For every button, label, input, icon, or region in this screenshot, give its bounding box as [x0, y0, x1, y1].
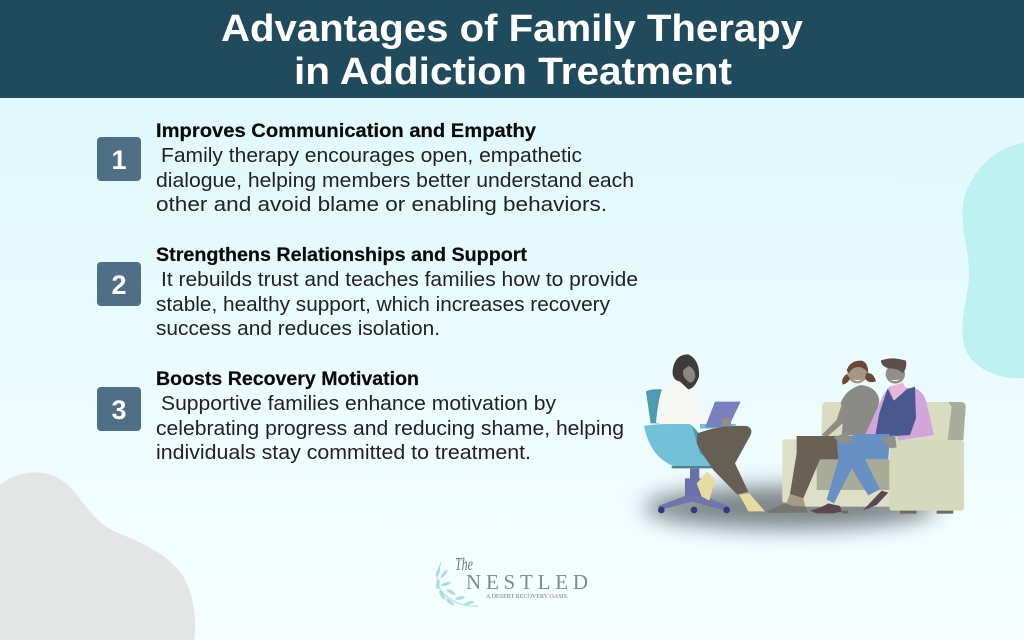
- logo text: The: The: [455, 554, 473, 574]
- item 1 heading: Improves Communication and Empathy: [156, 120, 536, 142]
- chair: [646, 389, 663, 423]
- decorative blob: right teal: [962, 143, 1024, 378]
- item 1: [97, 120, 634, 216]
- item 2 body: [156, 269, 638, 340]
- logo wreath: [435, 563, 478, 606]
- item 3 body: celebrating progress and reducing shame, helping: [156, 418, 624, 440]
- shirt: [656, 383, 715, 424]
- floor shadow: [643, 486, 937, 529]
- item 1 body: Family therapy encourages open, empathetic: [161, 145, 582, 167]
- illustration: therapy session: [643, 354, 966, 529]
- therapist: [644, 354, 765, 513]
- number badge 1: [97, 137, 141, 181]
- clipboard: [705, 402, 741, 427]
- legs: [697, 426, 751, 495]
- item 2: [97, 244, 638, 340]
- item 2 body: stable, healthy support, which increases recovery: [156, 294, 610, 316]
- hair and face: [673, 354, 699, 389]
- item 3 body: individuals stay committed to treatment.: [156, 442, 531, 464]
- sofa: [782, 402, 966, 514]
- logo: The Nestled: [435, 554, 588, 606]
- title banner: in Addiction Treatment: [294, 51, 732, 93]
- item 3 heading: Boosts Recovery Motivation: [156, 368, 419, 390]
- number badge 2: [97, 262, 141, 306]
- number badge 3: [97, 387, 141, 431]
- item 3 body: [156, 393, 624, 464]
- item 2 body: It rebuilds trust and teaches families how to provide: [161, 269, 638, 291]
- number badge 3: 3: [111, 395, 127, 425]
- item 3 body: Supportive families enhance motivation by: [161, 393, 556, 415]
- item 2 body: success and reduces isolation.: [156, 318, 440, 340]
- figures and furniture: [644, 354, 966, 514]
- item 3: [97, 368, 624, 464]
- shoes: [697, 472, 715, 501]
- man on sofa: [810, 358, 934, 513]
- title banner: Advantages of Family Therapy: [221, 8, 803, 50]
- number badge 2: 2: [111, 270, 127, 300]
- title banner: [0, 0, 1024, 98]
- item 1 body: [156, 145, 634, 216]
- item 2 heading: Strengthens Relationships and Support: [156, 244, 528, 266]
- decorative blob: bottom-left grey: [0, 472, 195, 640]
- woman on sofa: [767, 361, 879, 513]
- number badge 1: 1: [111, 145, 127, 175]
- item 1 body: dialogue, helping members better understand each: [156, 170, 634, 192]
- logo text: Nestled: NESTLED: [466, 570, 588, 594]
- logo tagline: A DESERT RECOVERY OASIS: [486, 593, 567, 600]
- item 1 body: other and avoid blame or enabling behaviors.: [156, 194, 607, 216]
